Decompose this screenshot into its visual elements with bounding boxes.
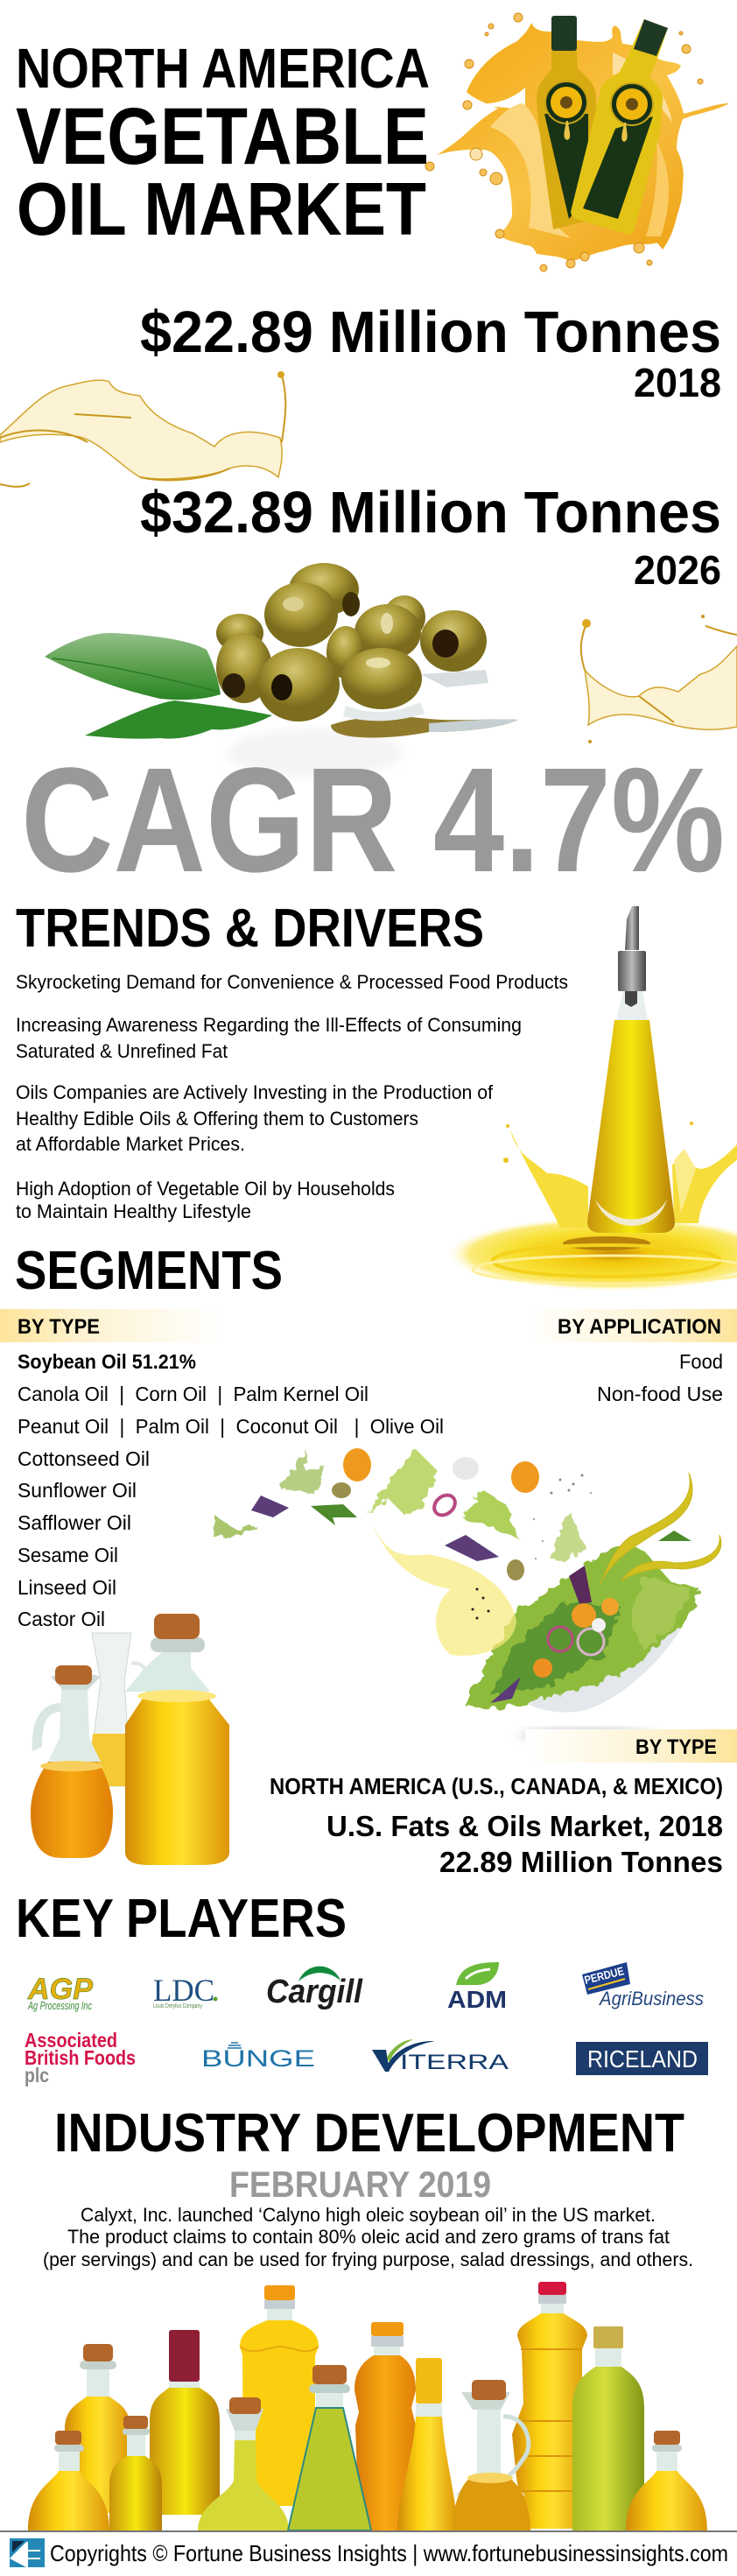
bottle: front right cork	[626, 2431, 707, 2530]
stat: 2018 volume	[140, 299, 721, 405]
text block: trends list: Increasing Awareness Regarding the Ill-Effects of Consuming	[16, 1014, 522, 1036]
logo: Cargill: Cargill	[266, 1974, 363, 2010]
logo: Associated British Foods: Associated	[25, 2029, 117, 2052]
bottle: tall yellow square	[240, 2285, 319, 2506]
stat: 2026 volume: 2026	[634, 547, 721, 593]
left bottle	[537, 16, 597, 229]
heading: trends and drivers: TRENDS & DRIVERS	[16, 898, 484, 959]
list: oil types: Safflower Oil	[18, 1511, 131, 1534]
bottle: green flask	[198, 2397, 289, 2530]
band: by application: BY APPLICATION	[558, 1315, 721, 1339]
title	[16, 37, 430, 251]
list: applications: Food	[679, 1350, 723, 1373]
logo: Bunge	[201, 2043, 315, 2072]
footer rule	[0, 2530, 737, 2532]
text block: development description	[43, 2204, 693, 2270]
logo: AGP: AGP	[27, 1973, 93, 2006]
illustration: green olives and leaves	[45, 563, 518, 778]
text block: regional summary: U.S. Fats & Oils Market, 2018	[326, 1810, 723, 1842]
text block: trends list: Skyrocketing Demand for Convenience & Processed Food Products	[16, 971, 568, 993]
bottle: triangular green	[288, 2365, 371, 2530]
text block: development description: The product claims to contain 80% oleic acid and zero grams of trans fat	[67, 2226, 670, 2248]
text block: development description: (per servings) and can be used for frying purpose, salad dressings, and others.	[43, 2249, 693, 2270]
title: OIL MARKET	[17, 168, 426, 251]
logo: ADM	[447, 1962, 507, 2013]
list: applications	[597, 1350, 723, 1405]
logo: LDC: LDC	[153, 1973, 214, 2008]
text block: trends list: Oils Companies are Actively Investing in the Production of	[16, 1081, 494, 1103]
logo: Viterra: ITERRA	[400, 2051, 509, 2074]
bottle: back left cork	[65, 2344, 130, 2513]
title: NORTH AMERICA	[16, 37, 430, 100]
text block: trends list: High Adoption of Vegetable Oil by Households	[16, 1178, 395, 1200]
text block: regional summary	[270, 1773, 723, 1878]
logo: Riceland: RICELAND	[587, 2045, 698, 2073]
bottle: orange plastic	[354, 2322, 416, 2530]
band: by type: BY TYPE	[18, 1315, 100, 1339]
text block: trends list: at Affordable Market Prices.	[16, 1133, 245, 1155]
logo: Bunge: BUNGE	[201, 2045, 315, 2072]
heading: industry development: INDUSTRY DEVELOPMENT	[54, 2103, 684, 2164]
stat: 2018 volume: $22.89 Million Tonnes	[140, 299, 721, 365]
list: oil types: Sesame Oil	[18, 1544, 118, 1566]
bottle: green olive oil	[572, 2326, 644, 2530]
list: applications: Non-food Use	[597, 1383, 723, 1405]
list: oil types: Peanut Oil | Palm Oil | Coconut Oil | Olive Oil	[18, 1415, 444, 1438]
text block: regional summary: 22.89 Million Tonnes	[439, 1846, 723, 1878]
text block: trends list	[16, 971, 568, 1222]
icon: Fortune Business Insights logo	[10, 2538, 45, 2567]
list: oil types: Sunflower Oil	[18, 1479, 137, 1502]
logo: Associated British Foods	[25, 2029, 136, 2087]
text block: development description: Calyxt, Inc. launched ‘Calyno high oleic soybean oil’ in the US market.	[81, 2204, 656, 2226]
heading: key players: KEY PLAYERS	[16, 1889, 347, 1949]
list: oil types: Linseed Oil	[18, 1576, 116, 1599]
logo: Perdue AgriBusiness	[582, 1962, 704, 2009]
list: oil types: Soybean Oil 51.21%	[18, 1350, 196, 1373]
logo: LDC: Louis Dreyfus Company	[153, 2003, 202, 2009]
stat: 2018 volume: 2018	[634, 360, 721, 405]
date: February 2019: FEBRUARY 2019	[229, 2164, 491, 2205]
right bottle	[571, 19, 668, 234]
bottle: amber jug	[453, 2380, 530, 2530]
logo: Viterra	[372, 2039, 509, 2074]
logos: key players	[25, 1962, 708, 2087]
logo: Perdue AgriBusiness: PERDUE	[583, 1964, 626, 1987]
illustration: oil cruet bottle in yellow splash	[445, 906, 737, 1292]
heading: segments: SEGMENTS	[15, 1241, 283, 1301]
illustration: row of oil bottles	[28, 2282, 707, 2530]
list: oil types	[18, 1350, 444, 1630]
bottle: tall narrow yellow	[397, 2358, 457, 2530]
band: by application	[525, 1309, 737, 1342]
stat: 2026 volume	[140, 480, 721, 593]
band: by type	[0, 1309, 223, 1342]
text block: trends list: Healthy Edible Oils & Offering them to Customers	[16, 1108, 418, 1130]
logo: Perdue AgriBusiness: AgriBusiness	[598, 1988, 704, 2009]
list: oil types: Canola Oil | Corn Oil | Palm Kernel Oil	[18, 1383, 368, 1405]
text block: trends list: to Maintain Healthy Lifestyle	[16, 1200, 251, 1222]
list: oil types: Castor Oil	[18, 1608, 105, 1630]
text block: trends list: Saturated & Unrefined Fat	[16, 1040, 228, 1062]
illustration: pale oil splash left	[0, 371, 285, 487]
logo: Associated British Foods: plc	[25, 2064, 49, 2087]
bottle: front left cork	[28, 2431, 109, 2530]
list: oil types: Cottonseed Oil	[18, 1447, 150, 1470]
logo: Associated British Foods: British Foods	[25, 2046, 136, 2069]
band: regional by type: BY TYPE	[635, 1735, 717, 1759]
bottle: wine style with maroon capsule	[150, 2330, 220, 2515]
bottle: small cork	[109, 2416, 162, 2530]
stat: 2026 volume: $32.89 Million Tonnes	[140, 480, 721, 545]
logo: AGP: Ag Processing Inc	[27, 1999, 92, 2012]
band: regional by type	[525, 1729, 737, 1763]
illustration: oil jugs with corks	[31, 1614, 229, 1865]
title: VEGETABLE	[16, 92, 429, 181]
illustration: salad bowl with flying ingredients	[213, 1448, 721, 1743]
illustration: oil bottles with orange splash	[425, 13, 729, 271]
logo: ADM: ADM	[447, 1986, 507, 2013]
illustration: pale oil splash right	[581, 615, 737, 743]
bottle: tall plastic with red cap	[512, 2282, 587, 2529]
